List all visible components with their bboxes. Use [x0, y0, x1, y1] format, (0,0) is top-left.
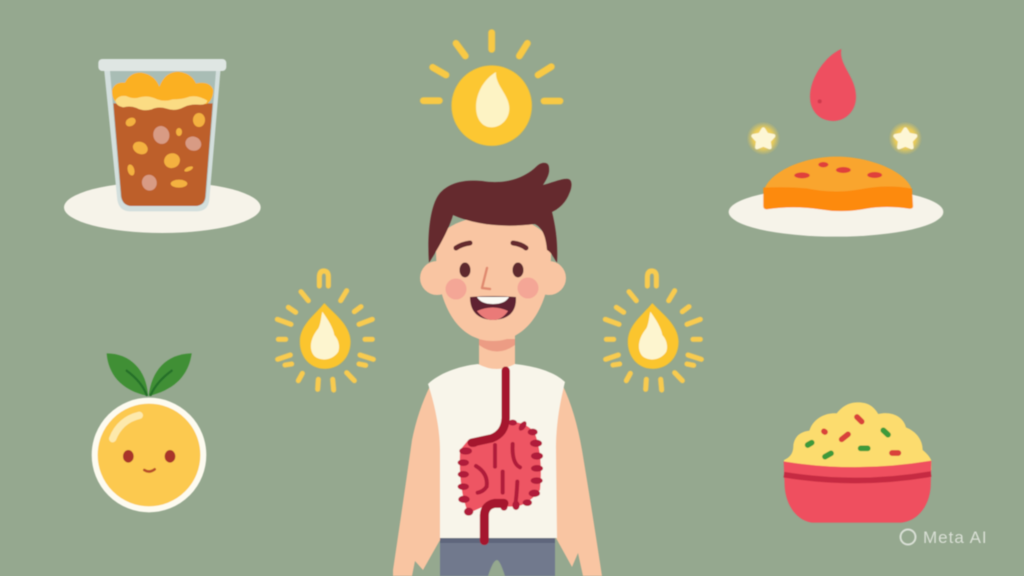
orange fruit character: [95, 353, 203, 509]
oesophagus and intestine: [472, 371, 506, 443]
glowing sun with drop: [423, 33, 560, 146]
right glowing drop: [605, 271, 701, 390]
fruit body: [95, 401, 203, 509]
highlight: [113, 415, 139, 439]
watermark ring: [900, 530, 916, 544]
eyes: [460, 262, 470, 278]
watermark: [900, 528, 988, 547]
sun disc: [452, 66, 532, 146]
rice mound: [784, 402, 931, 470]
shirt: [428, 364, 565, 538]
ears: [420, 261, 454, 295]
orange foam: [112, 72, 213, 104]
nose: [482, 268, 490, 289]
left star: [747, 122, 780, 155]
cheeks: [446, 278, 466, 300]
right star: [889, 122, 922, 155]
trousers: [440, 538, 555, 576]
cream layer: [115, 96, 207, 110]
inner folds: [476, 444, 520, 507]
left glowing drop: [277, 271, 373, 390]
glass body: [104, 68, 221, 211]
watermark text: Meta AI: [923, 528, 988, 547]
plate: [64, 182, 261, 233]
arms: [393, 384, 440, 576]
bowl stripe: [784, 474, 931, 481]
hair: [428, 163, 572, 263]
plate: [729, 187, 943, 237]
bowl: [784, 461, 931, 523]
sun rays: [423, 33, 560, 101]
pie side: [763, 186, 913, 211]
pie top: [764, 157, 912, 197]
mouth: [470, 296, 516, 320]
arch: [319, 271, 328, 286]
stomach body: [460, 422, 541, 513]
eyes: [123, 450, 134, 463]
pie with red drop and stars: [729, 49, 943, 237]
drink pieces: [124, 113, 205, 188]
red drop: [810, 49, 856, 121]
bowl of rice: [784, 402, 931, 523]
smile: [144, 469, 155, 472]
rays: [605, 291, 701, 390]
drink glass on plate: [64, 59, 261, 233]
drop: [476, 72, 509, 127]
arch: [647, 271, 656, 286]
drop body: [300, 303, 350, 369]
rice garnish: [808, 417, 898, 457]
rays: [277, 291, 373, 390]
drink: [113, 103, 213, 206]
person: [393, 163, 602, 576]
flame: [639, 312, 667, 359]
eyebrows: [456, 243, 526, 248]
face: [436, 216, 551, 341]
pie toppings: [794, 162, 882, 178]
leaves: [107, 353, 148, 396]
intestine bumps: [458, 420, 543, 516]
flame: [311, 312, 339, 359]
drop body: [628, 303, 678, 369]
neck: [479, 335, 515, 372]
rim: [98, 59, 226, 71]
digestive system: [458, 371, 543, 541]
